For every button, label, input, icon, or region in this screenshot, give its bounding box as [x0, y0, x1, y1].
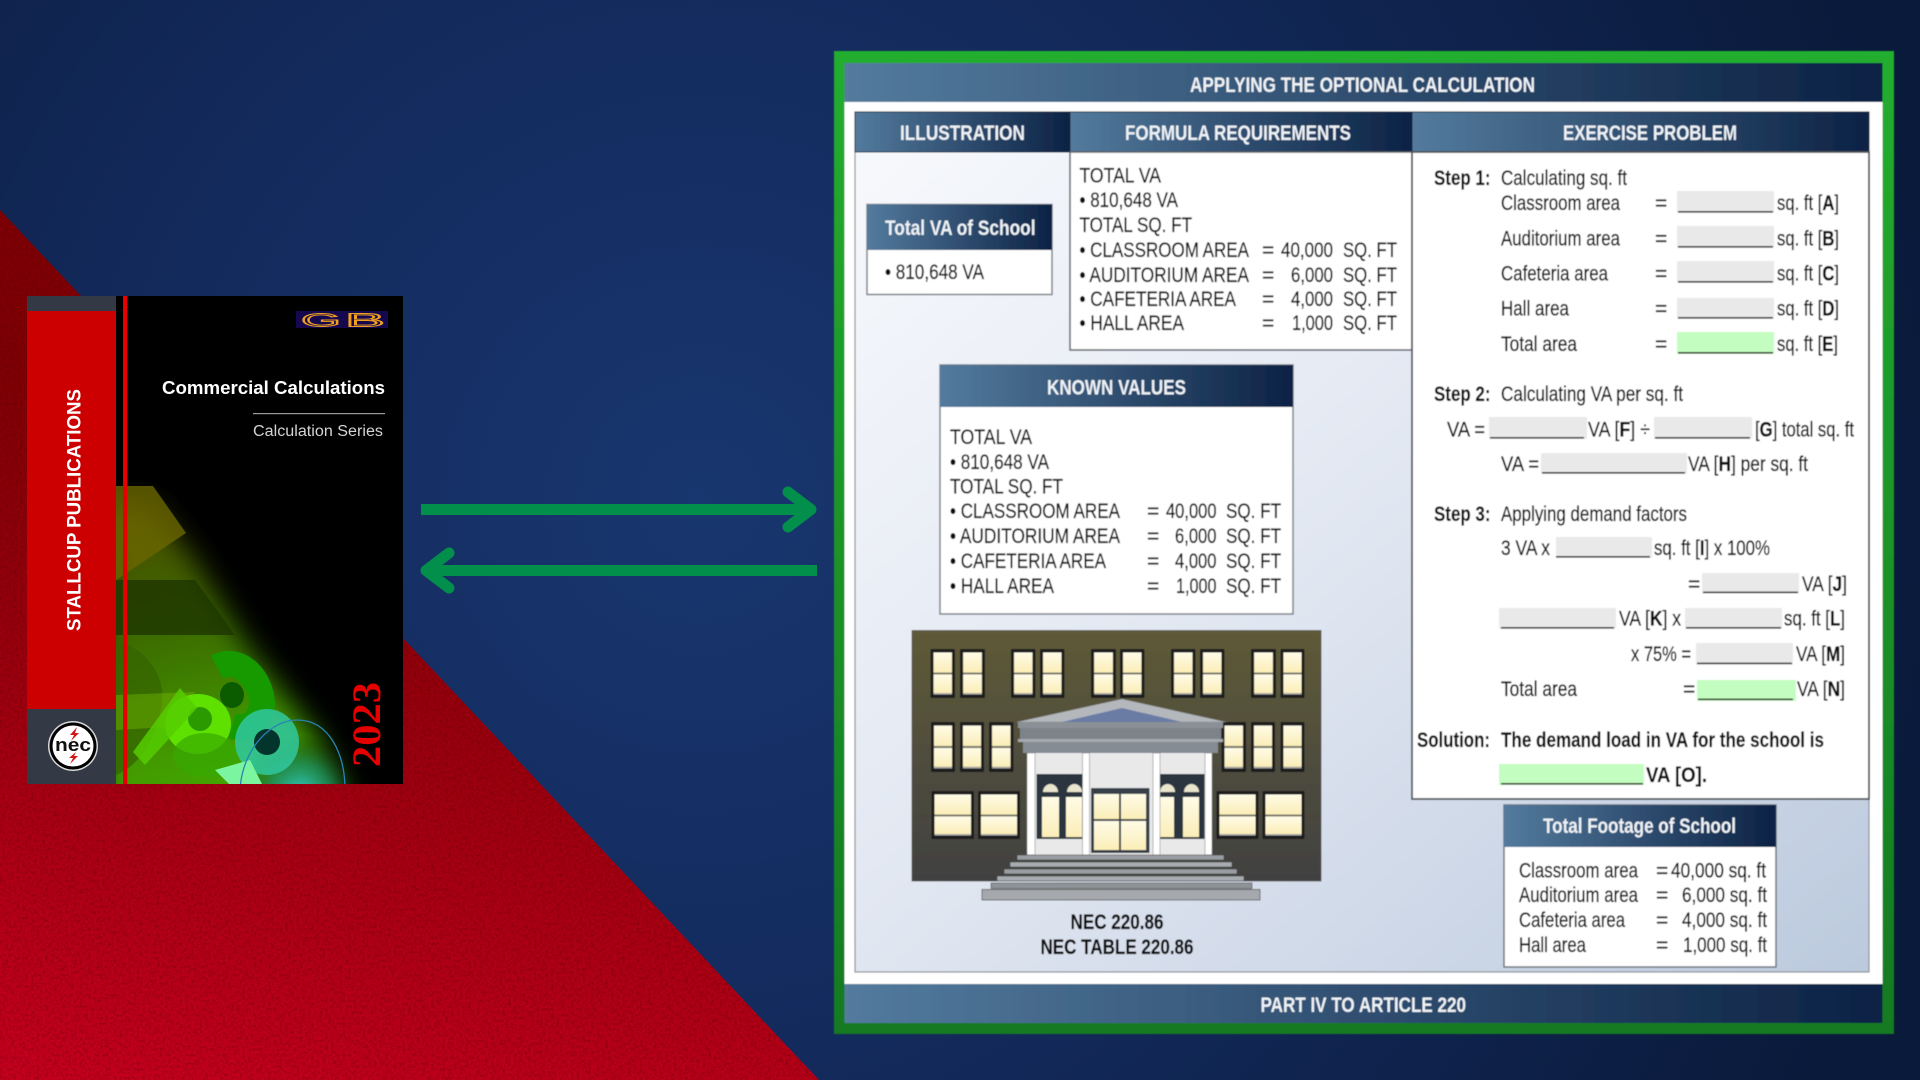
icon: GB logo: [296, 310, 388, 330]
step 1: =: [1655, 192, 1667, 215]
step 3: VA [J]: [1802, 573, 1847, 596]
icon: GB logo: B: [345, 310, 385, 330]
header: formula requirements: [1070, 112, 1412, 152]
panel: known values: • HALL AREA: [950, 575, 1054, 598]
year 2023: 2023: [344, 682, 389, 767]
panel: total footage of school: =: [1656, 934, 1668, 957]
panel: formula requirements: =: [1262, 264, 1274, 287]
step 2: VA [H] per sq. ft: [1688, 453, 1808, 476]
panel: known values: TOTAL SQ. FT: [950, 476, 1063, 498]
solution: The demand load in VA for the school is: [1501, 729, 1824, 752]
panel: formula requirements: SQ. FT: [1343, 312, 1397, 335]
book subtitle: Calculation Series: [253, 423, 383, 440]
illustration: school building: [912, 630, 1321, 900]
panel: formula requirements: SQ. FT: [1343, 239, 1397, 262]
panel: total VA of school: • 810,648 VA: [885, 261, 984, 284]
illustration caption: NEC 220.86: [1070, 911, 1164, 934]
step 1: =: [1655, 333, 1667, 356]
panel: total footage of school: [1504, 805, 1776, 967]
white slide background: [844, 63, 1882, 1023]
step 3: VA [K] x: [1619, 608, 1681, 630]
footer bar: PART IV TO ARTICLE 220: [1260, 994, 1466, 1017]
step 1: Total area: [1501, 333, 1577, 356]
panel: total footage of school: 1,000 sq. ft: [1683, 934, 1767, 957]
panel: total footage of school: 4,000 sq. ft: [1682, 909, 1767, 932]
panel: formula requirements: TOTAL SQ. FT: [1080, 214, 1192, 237]
step 1: Calculating sq. ft: [1501, 167, 1627, 190]
icon: GB logo: G: [301, 310, 341, 330]
panel: known values: TOTAL VA: [950, 426, 1032, 449]
step 3: Applying demand factors: [1501, 503, 1687, 526]
panel: known values: SQ. FT: [1226, 575, 1281, 598]
panel: formula requirements: 40,000: [1281, 239, 1333, 262]
step 1: sq. ft [A]: [1777, 192, 1839, 215]
panel: formula requirements: 4,000: [1291, 288, 1333, 311]
panel: known values: • CLASSROOM AREA: [950, 500, 1120, 523]
illustration caption: NEC TABLE 220.86: [1040, 936, 1194, 959]
step 1: =: [1655, 228, 1667, 250]
icon: NEC logo: nec: [55, 735, 91, 755]
step 2: [G] total sq. ft: [1755, 418, 1854, 442]
panel: known values: • AUDITORIUM AREA: [950, 525, 1120, 548]
panel: known values: SQ. FT: [1226, 550, 1281, 573]
illustration caption: [1040, 911, 1194, 959]
solution: VA [O].: [1646, 764, 1707, 787]
icon: NEC logo: [48, 721, 98, 771]
step 1: Auditorium area: [1501, 228, 1620, 250]
step 2: VA [F] ÷: [1588, 418, 1650, 442]
step 3: sq. ft [I] x 100%: [1654, 537, 1770, 560]
step 3: sq. ft [L]: [1784, 608, 1845, 630]
panel: known values: SQ. FT: [1226, 500, 1281, 523]
panel: total footage of school: =: [1656, 860, 1668, 882]
red vertical stripe: [123, 296, 127, 784]
panel: known values: • CAFETERIA AREA: [950, 550, 1106, 573]
book title: Commercial Calculations: [162, 378, 385, 398]
panel: formula requirements: =: [1262, 288, 1274, 311]
panel: formula requirements: =: [1262, 312, 1274, 335]
header: exercise problem: EXERCISE PROBLEM: [1563, 122, 1737, 145]
step 1: sq. ft [D]: [1777, 298, 1839, 320]
bottom row windows: [932, 791, 1304, 839]
book cover: Commercial Calculations: [27, 296, 403, 784]
panel: known values: =: [1147, 500, 1159, 523]
panel: total footage of school: =: [1656, 884, 1668, 907]
panel: total footage of school: Total Footage of School: [1543, 815, 1736, 838]
panel: total footage of school: Cafeteria area: [1519, 909, 1625, 932]
step 1: =: [1655, 298, 1667, 320]
step 1: Step 1:: [1434, 167, 1490, 190]
panel: known values: KNOWN VALUES: [1047, 376, 1186, 400]
step 3: =: [1688, 573, 1700, 596]
panel: known values: 4,000: [1175, 550, 1216, 573]
panel: formula requirements: • HALL AREA: [1080, 312, 1184, 335]
panel: formula requirements: • 810,648 VA: [1080, 189, 1178, 212]
solution: Solution:: [1417, 729, 1490, 752]
portico: [1017, 699, 1226, 855]
step 1: Hall area: [1501, 298, 1569, 320]
green border: [834, 51, 1894, 1034]
panel: total footage of school: 40,000 sq. ft: [1671, 860, 1766, 882]
solution: [1417, 729, 1824, 787]
step 2: [1434, 383, 1854, 476]
step 3: =: [1683, 678, 1695, 701]
diagram background panel: [855, 112, 1869, 972]
step 3: Step 3:: [1434, 503, 1490, 526]
panel: formula requirements: • CLASSROOM AREA: [1080, 239, 1249, 262]
top row windows: [930, 649, 1304, 698]
panel: total footage of school: 6,000 sq. ft: [1682, 884, 1767, 907]
header: illustration: [855, 112, 1070, 152]
panel: known values: =: [1147, 525, 1159, 548]
background: red diagonal triangle: [0, 210, 819, 1080]
spine text: STALLCUP PUBLICATIONS: [64, 389, 86, 631]
footer bar: [844, 984, 1882, 1023]
panel: total VA of school: [867, 204, 1052, 294]
step 1: Classroom area: [1501, 192, 1620, 215]
step 2: VA =: [1501, 453, 1539, 476]
arrow: right: [421, 492, 811, 527]
panel: total footage of school: =: [1656, 909, 1668, 932]
panel: formula requirements: 1,000: [1292, 312, 1333, 335]
step 1: sq. ft [B]: [1777, 228, 1839, 250]
panel: formula requirements: 6,000: [1291, 264, 1333, 287]
step 2: VA =: [1447, 418, 1485, 442]
step 1: sq. ft [C]: [1777, 262, 1839, 286]
title bar: [844, 63, 1882, 102]
step 1: [1434, 167, 1839, 356]
step 3: [1434, 503, 1847, 701]
panel: formula requirements: [1070, 152, 1412, 350]
arrow: left: [426, 553, 817, 588]
step 1: Cafeteria area: [1501, 262, 1608, 286]
panel: known values: 1,000: [1176, 575, 1216, 598]
book front cover background: [116, 296, 403, 784]
divider under title: [253, 413, 385, 414]
panel: total VA of school: Total VA of School: [885, 217, 1036, 240]
panel: known values: SQ. FT: [1226, 525, 1281, 548]
step 1: =: [1655, 262, 1667, 286]
header: formula requirements: FORMULA REQUIREMENTS: [1125, 122, 1351, 145]
panel: green frame with slide: [834, 51, 1894, 1034]
panel: formula requirements: • CAFETERIA AREA: [1080, 288, 1236, 311]
step 2: Step 2:: [1434, 383, 1490, 406]
middle row windows: [931, 722, 1304, 772]
panel: total footage of school: Classroom area: [1519, 860, 1638, 882]
panel: known values: [940, 365, 1293, 614]
panel: total footage of school: Auditorium area: [1519, 884, 1638, 907]
panel: formula requirements: TOTAL VA: [1080, 164, 1161, 188]
panel: known values: 40,000: [1166, 500, 1216, 523]
panel: known values: • 810,648 VA: [950, 451, 1049, 474]
header: exercise problem: [1412, 112, 1869, 152]
panel: formula requirements: • AUDITORIUM AREA: [1080, 264, 1249, 287]
panel: exercise problem: [1412, 152, 1869, 799]
panel: formula requirements: SQ. FT: [1343, 288, 1397, 311]
panel: known values: 6,000: [1175, 525, 1216, 548]
step 3: VA [M]: [1796, 643, 1845, 666]
panel: total footage of school: Hall area: [1519, 934, 1586, 957]
step 2: Calculating VA per sq. ft: [1501, 383, 1683, 406]
panel: formula requirements: SQ. FT: [1343, 264, 1397, 287]
step 3: x 75% =: [1631, 643, 1691, 666]
header: illustration: ILLUSTRATION: [900, 122, 1025, 145]
step 3: Total area: [1501, 678, 1577, 701]
spine: [27, 296, 116, 784]
front steps: [982, 855, 1260, 900]
panel: known values: =: [1147, 550, 1159, 573]
step 1: sq. ft [E]: [1777, 333, 1838, 356]
title bar: APPLYING THE OPTIONAL CALCULATION: [1190, 74, 1535, 97]
cover artwork: green numerals glow: [116, 486, 361, 784]
step 3: VA [N]: [1797, 678, 1845, 701]
step 3: 3 VA x: [1501, 537, 1550, 560]
panel: known values: =: [1147, 575, 1159, 598]
panel: formula requirements: =: [1262, 239, 1274, 262]
